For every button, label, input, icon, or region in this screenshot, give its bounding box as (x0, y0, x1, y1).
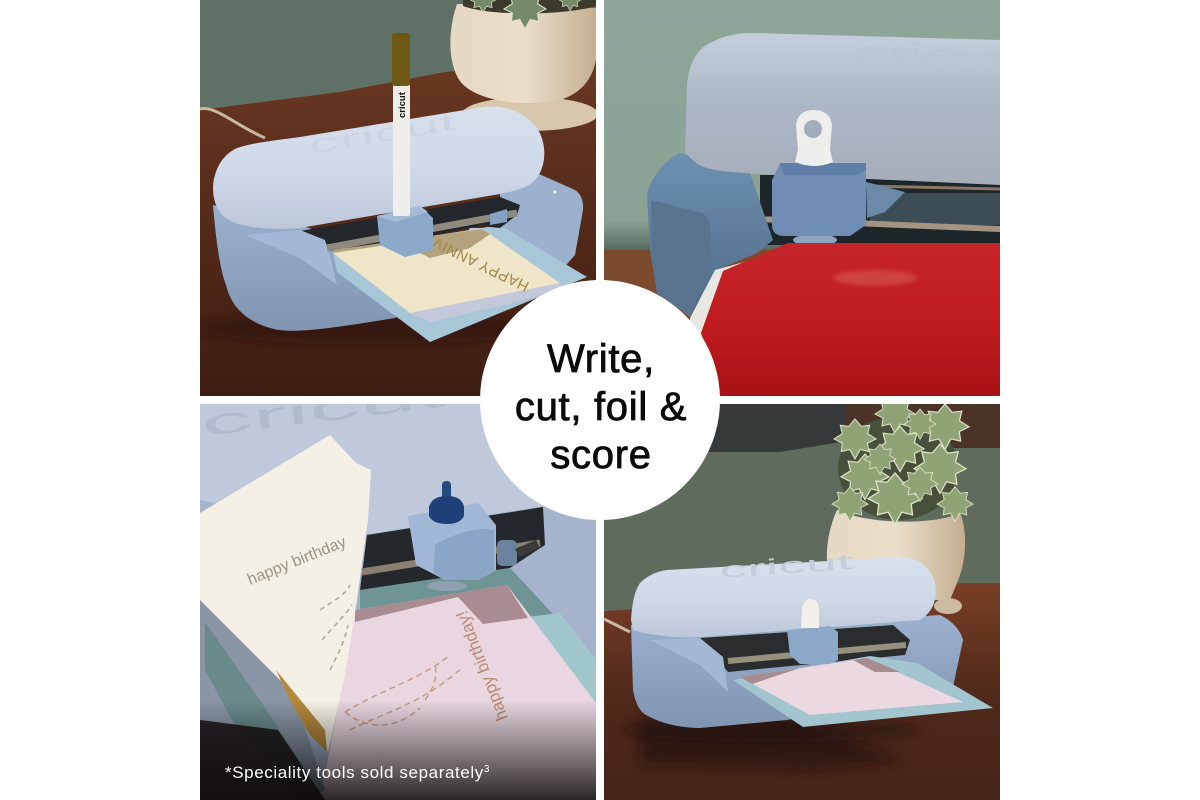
table reflection (640, 717, 905, 770)
plant shaded mass (838, 416, 958, 520)
navy scoring knob (429, 481, 464, 524)
headline: cut, foil & (515, 385, 687, 429)
pink paper (740, 658, 963, 715)
machine opening (300, 197, 520, 254)
ivy plant (832, 395, 973, 524)
red foil (701, 243, 1000, 396)
hood (213, 106, 544, 229)
carriage (408, 503, 538, 591)
steel rod (327, 213, 517, 248)
white tool (801, 599, 819, 628)
wall (200, 0, 596, 120)
hood (200, 404, 545, 534)
cutting mat (733, 656, 993, 727)
pink paper with writing: happy birthday! (452, 608, 512, 723)
panel: scoring tool (199, 373, 596, 800)
headline: score (550, 433, 652, 477)
brown cushion (845, 404, 1000, 448)
cream card with handwriting: HAPPY ANNIVER (410, 224, 532, 295)
headline: Write, (547, 337, 655, 381)
infographic canvas (200, 0, 1000, 800)
base inset panel (651, 200, 711, 317)
power cable (604, 619, 630, 632)
machine shadow (620, 718, 920, 742)
dark gap and rods (755, 175, 1000, 245)
teal mat strip (205, 622, 325, 800)
cream card with handwriting (333, 224, 560, 313)
wall (604, 0, 1000, 260)
pen tool: cricut (397, 91, 408, 118)
power cable (200, 108, 265, 138)
white foil transfer sheet (200, 435, 371, 752)
printer body left (213, 205, 397, 331)
hood (631, 557, 936, 637)
pink paper with writing (320, 585, 596, 800)
embossed logo: cricut (199, 373, 447, 444)
base left lip (650, 638, 728, 692)
cricut embossed logo: cricut (306, 108, 459, 160)
plant pot (450, 0, 598, 131)
white foil transfer sheet: happy birthday (245, 534, 349, 589)
steel rod (362, 543, 540, 572)
headline (515, 337, 687, 477)
note: speciality tools: 3 (484, 764, 490, 775)
panel: foil tool (604, 0, 1015, 396)
left lip of base (245, 230, 337, 285)
wooden table (200, 60, 596, 396)
dark cushion (700, 404, 860, 452)
carriage (787, 626, 838, 664)
white foil handle (795, 110, 833, 166)
embossed logo: cricut (853, 36, 1015, 75)
dark gap (360, 507, 545, 590)
opening (700, 625, 910, 672)
foil highlight (833, 270, 917, 286)
machine base (631, 615, 963, 728)
dark table corner (200, 720, 325, 800)
centre circle with headline (480, 280, 720, 520)
panel: machine with plant (604, 395, 1000, 800)
paper shadow (740, 658, 900, 684)
teal mat (360, 568, 596, 703)
embossed logo: cricut (719, 549, 853, 583)
hood (685, 33, 1000, 185)
left lower shaded area (200, 590, 325, 800)
backing sheet (410, 228, 565, 322)
plant pot (827, 510, 965, 614)
carriage (377, 206, 507, 257)
power light (554, 190, 556, 194)
light mat area (527, 613, 596, 703)
machine base backdrop (200, 500, 596, 794)
table (604, 250, 772, 320)
pen tool (392, 33, 410, 216)
sofa background (604, 404, 1000, 634)
cutting mat (333, 225, 587, 342)
machine base (647, 153, 773, 317)
wooden table (604, 583, 1000, 800)
foil sheet white edge (690, 262, 745, 396)
carriage (772, 163, 905, 246)
note: speciality tools: *Speciality tools sold separately (225, 763, 484, 782)
printer shadow (202, 316, 512, 344)
printer body right (500, 174, 584, 265)
panel: pen tool (195, 0, 598, 396)
bottom dark gradient (200, 700, 596, 800)
steel rod (728, 645, 906, 661)
